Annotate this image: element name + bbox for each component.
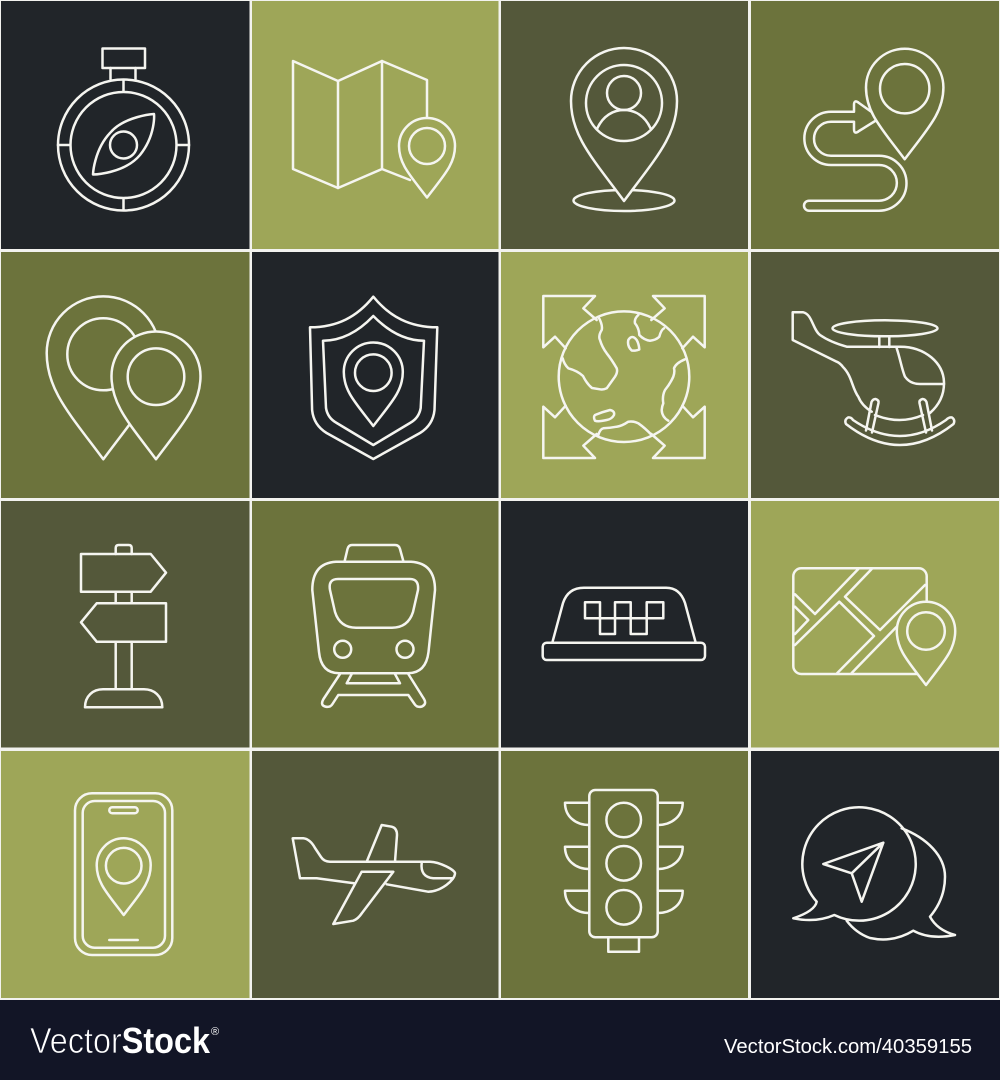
footer bar [0,1000,1000,1080]
panel: compass [1,1,250,249]
icon: city map with pin [793,568,955,685]
icon: signpost [81,545,166,707]
panel: globe [501,252,748,498]
panel: phone [1,751,250,998]
panel: signpost [1,501,250,748]
icon: winding route with pin [804,49,943,211]
footer image id: VectorStock.com/40359155 [724,1035,972,1058]
panel: city map [751,501,999,748]
panel: shield [252,252,498,498]
icon: taxi roof sign [543,588,705,660]
panel: train [252,501,498,748]
icon: train [312,545,435,707]
panel: chat navigation [751,751,999,998]
footer logo: VectorStock [30,1020,211,1061]
icon: phone with pin [75,793,172,955]
icon: helicopter [793,312,954,445]
panel: folded map [252,1,498,249]
icon: shield with pin [310,297,437,459]
icon: person pin [571,48,677,211]
panel: traffic light [501,751,748,998]
icon: chat bubbles with navigation arrow [793,807,955,939]
panel: helicopter [751,252,999,498]
panel: airplane [252,751,498,998]
icon: traffic light [565,790,683,952]
icon: compass [58,48,189,210]
icon: two location pins [47,296,201,459]
panel: person location [501,1,748,249]
icon: airplane [293,825,455,924]
icon: folded map with pin [293,61,455,198]
registered mark: ® [211,1026,219,1038]
icon: globe with four arrows [543,296,705,458]
panel: taxi sign [501,501,748,748]
panel: two pins [1,252,250,498]
panel: route [751,1,999,249]
